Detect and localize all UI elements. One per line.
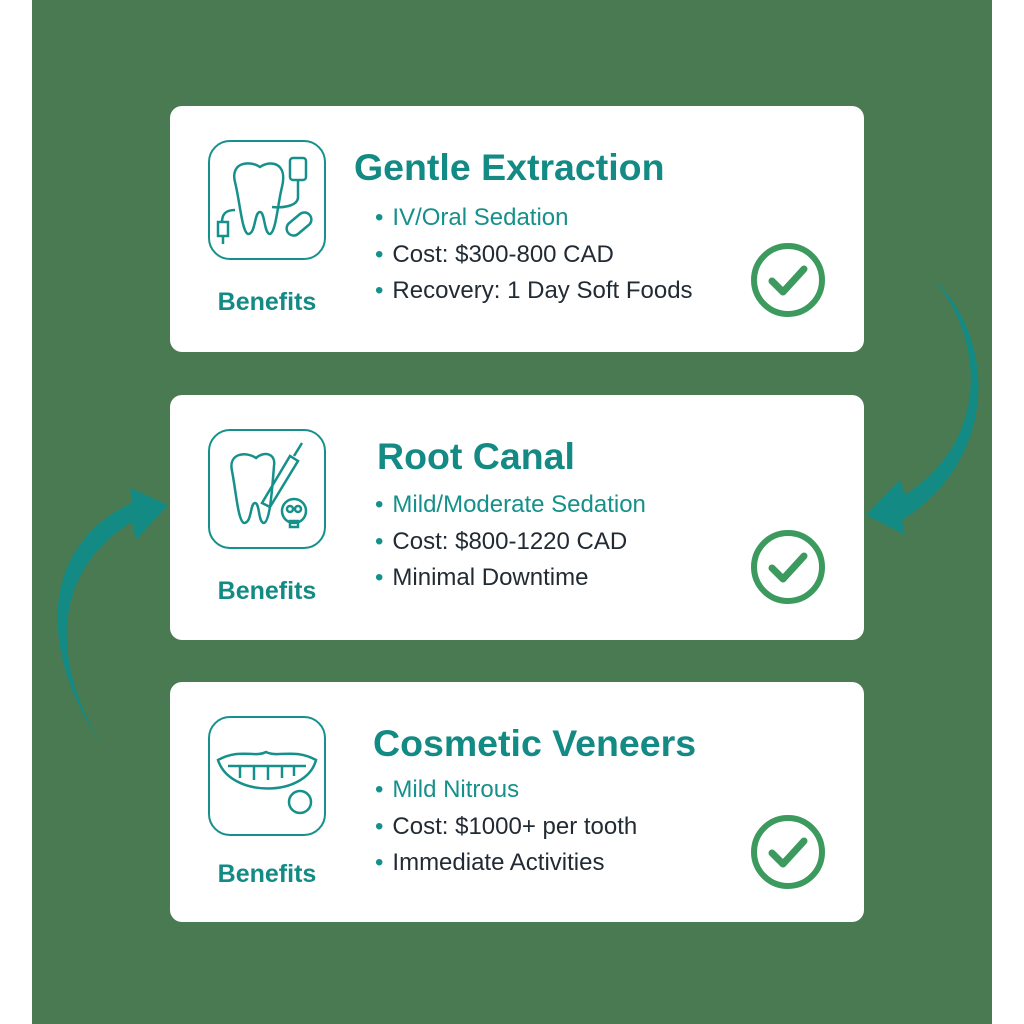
label: benefits: Benefits [218, 577, 316, 605]
list [376, 204, 693, 304]
card: gentle extraction [170, 106, 864, 352]
list: Immediate Activities [392, 849, 604, 876]
icon: check [751, 815, 825, 889]
list: IV/Oral Sedation [392, 204, 569, 231]
icon: check [751, 243, 825, 317]
label: benefits: Benefits [218, 288, 316, 316]
icon: check [751, 530, 825, 604]
list: Mild Nitrous [392, 776, 519, 803]
icon: tooth with IV [208, 140, 326, 260]
list [376, 776, 637, 876]
card: cosmetic veneers [170, 682, 864, 922]
heading: Root Canal [377, 435, 575, 477]
icon: smile [208, 716, 326, 836]
list: Minimal Downtime [392, 564, 588, 591]
icon: tooth with drill [208, 429, 326, 549]
list: Cost: $300-800 CAD [392, 240, 614, 268]
list: Cost: $1000+ per tooth [392, 812, 637, 840]
list: Mild/Moderate Sedation [392, 491, 646, 518]
card: root canal [170, 395, 864, 640]
list: Recovery: 1 Day Soft Foods [392, 277, 693, 304]
label: benefits: Benefits [218, 860, 316, 888]
heading: Gentle Extraction [354, 146, 664, 188]
list: Cost: $800-1220 CAD [392, 528, 627, 554]
list [376, 491, 646, 591]
heading: Cosmetic Veneers [373, 722, 696, 764]
